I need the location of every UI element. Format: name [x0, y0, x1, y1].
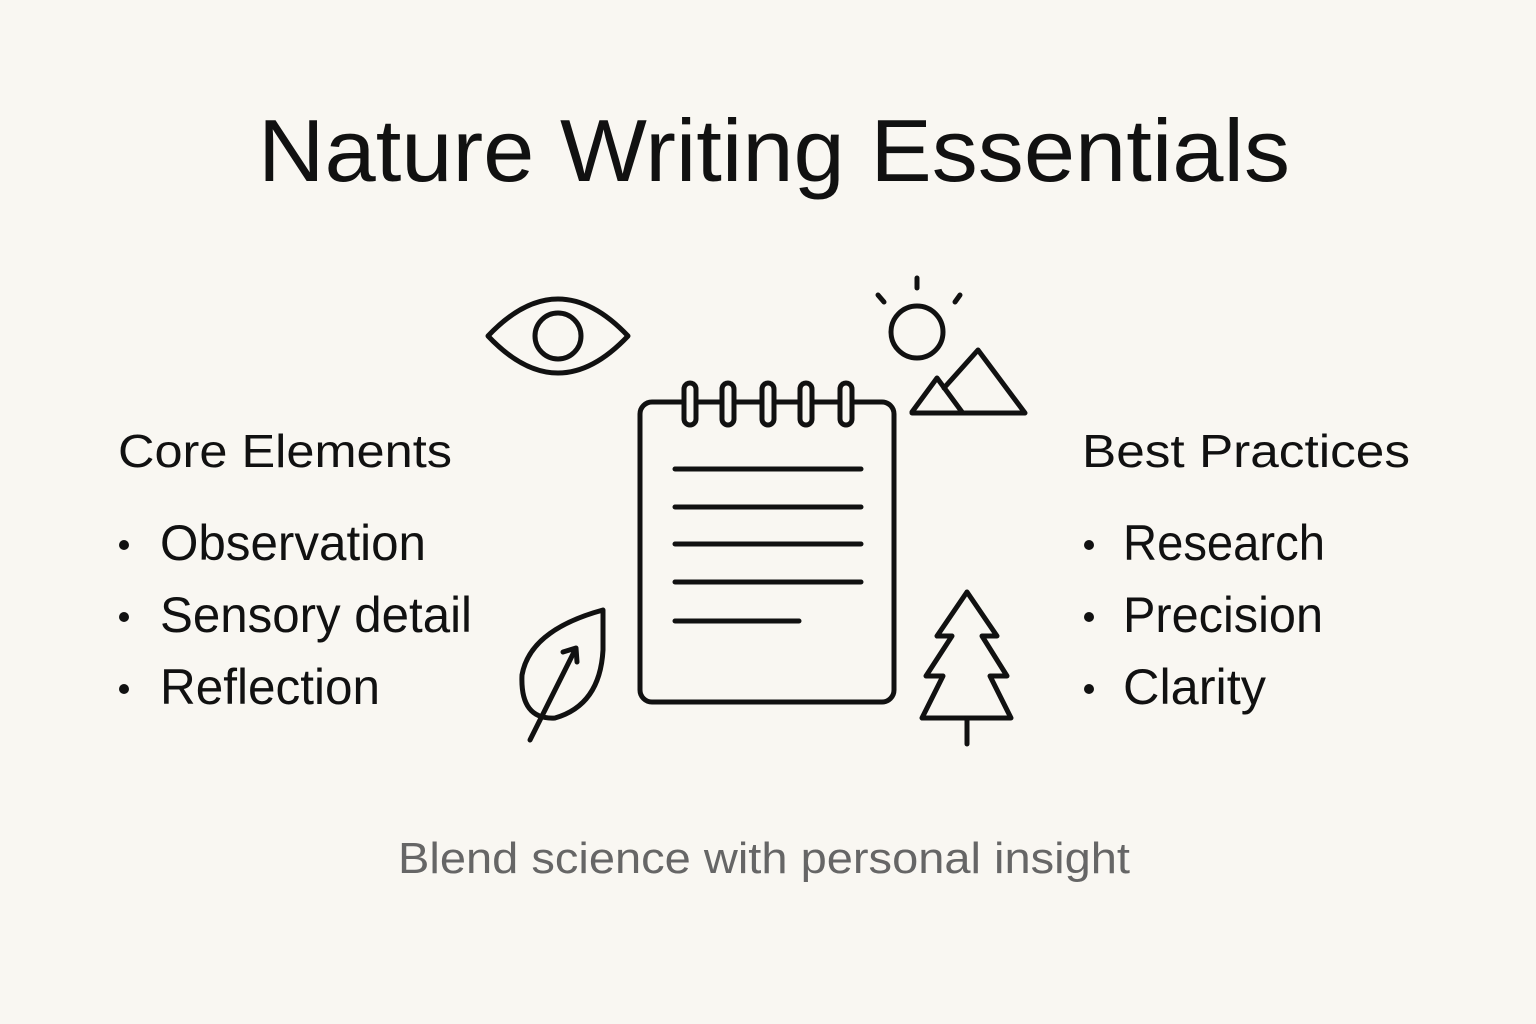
panel: core elements	[118, 425, 472, 715]
heading: best practices: Best Practices	[1082, 425, 1410, 477]
list: core elements: Sensory detail	[160, 587, 472, 643]
icon: sun and mountains	[878, 278, 1025, 413]
icon: notebook	[640, 383, 894, 702]
list: core elements: Reflection	[160, 659, 380, 715]
icon: eye	[488, 299, 628, 373]
list: core elements	[119, 515, 472, 715]
list: best practices: Clarity	[1123, 659, 1266, 715]
icon: leaf	[522, 610, 603, 740]
panel: best practices	[1082, 425, 1410, 715]
icon: pine tree	[922, 592, 1011, 744]
subtitle: Blend science with personal insight	[398, 834, 1130, 883]
list: best practices	[1084, 515, 1325, 715]
list: best practices: Precision	[1123, 587, 1323, 643]
title: Nature Writing Essentials	[258, 101, 1290, 200]
heading: core elements: Core Elements	[118, 425, 452, 477]
list: core elements: Observation	[160, 515, 426, 571]
list: best practices: Research	[1123, 515, 1325, 571]
